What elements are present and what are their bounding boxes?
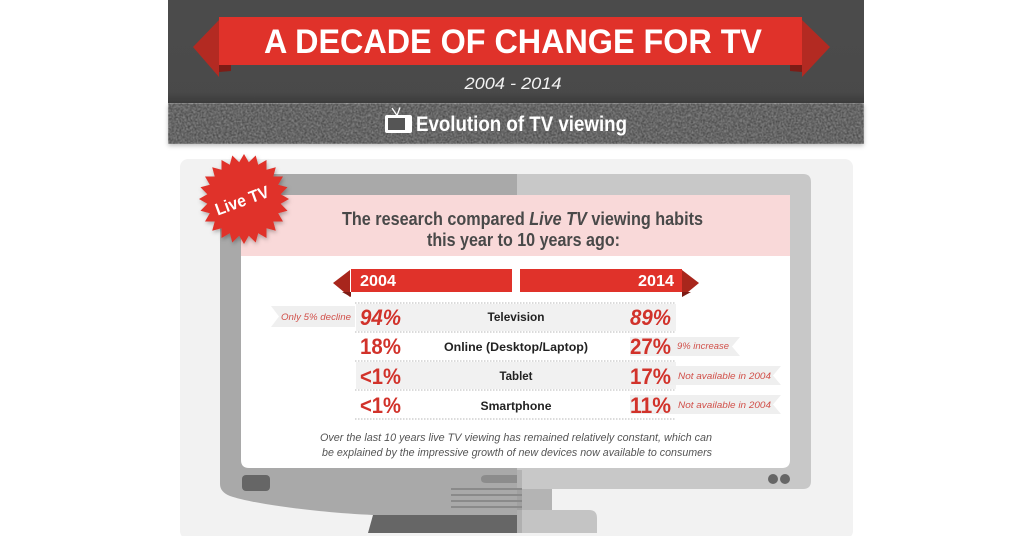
section heading: Evolution of TV viewing: [416, 113, 627, 136]
icon: television: [385, 108, 412, 133]
row: television: 89%: [630, 305, 671, 330]
row: online: 18%: [360, 334, 401, 359]
row: smartphone: Smartphone: [480, 399, 552, 413]
intro text: The research compared Live TV viewing habits: [342, 209, 703, 229]
tag: not available in 2004 (smartphone): [630, 395, 781, 414]
tag: not available in 2004 (tablet): Not available in 2004: [678, 371, 771, 381]
footnote: Over the last 10 years live TV viewing has remained relatively constant, which can: [320, 432, 712, 444]
row: online: 27%: [630, 334, 671, 359]
title: A DECADE OF CHANGE FOR TV: [264, 23, 762, 61]
power button: [242, 475, 270, 491]
row: online: Online (Desktop/Laptop): [444, 340, 588, 354]
row: tablet: Tablet: [500, 369, 532, 383]
data table: [271, 303, 781, 419]
tag: not available in 2004 (tablet): [630, 366, 781, 385]
footnote: [320, 432, 712, 459]
year header: 2014: 2014: [638, 273, 674, 290]
starburst badge: Live TV: Live TV: [213, 182, 272, 219]
header band: [168, 0, 864, 144]
row: tablet: <1%: [360, 364, 401, 389]
date range: 2004 - 2014: [463, 74, 562, 93]
tag: 9% increase: [630, 337, 740, 356]
year header: 2004: [333, 269, 512, 297]
row: smartphone: [360, 393, 671, 418]
row: online: [360, 334, 671, 359]
panel: live tv: [180, 159, 853, 536]
row: tablet: [360, 364, 671, 389]
screen: [241, 195, 790, 468]
row: smartphone: 11%: [630, 393, 671, 418]
year header: 2004: 2004: [360, 273, 396, 290]
intro banner: [241, 195, 790, 256]
row: tablet: 17%: [630, 364, 671, 389]
intro text: [342, 209, 703, 250]
starburst badge: Live TV: [199, 154, 289, 244]
control dots: [768, 474, 790, 484]
row bands: [356, 304, 676, 389]
speaker grille: [451, 488, 522, 508]
tag: not available in 2004 (smartphone): Not available in 2004: [678, 400, 771, 410]
title ribbon: [193, 17, 830, 77]
speaker slot: [481, 475, 517, 483]
intro text: this year to 10 years ago:: [427, 230, 620, 250]
tag: only 5% decline: Only 5% decline: [281, 312, 351, 322]
section heading: [385, 108, 627, 136]
television illustration: [220, 174, 811, 533]
row: television: [360, 305, 671, 330]
row: television: 94%: [360, 305, 401, 330]
footnote: be explained by the impressive growth of new devices now available to consumers: [322, 447, 712, 459]
year header: 2014: [520, 269, 699, 297]
tag: only 5% decline: [271, 306, 355, 327]
row: smartphone: <1%: [360, 393, 401, 418]
noise subtitle band: [168, 103, 864, 144]
tag: 9% increase: 9% increase: [677, 341, 729, 351]
row: television: Television: [488, 310, 544, 324]
